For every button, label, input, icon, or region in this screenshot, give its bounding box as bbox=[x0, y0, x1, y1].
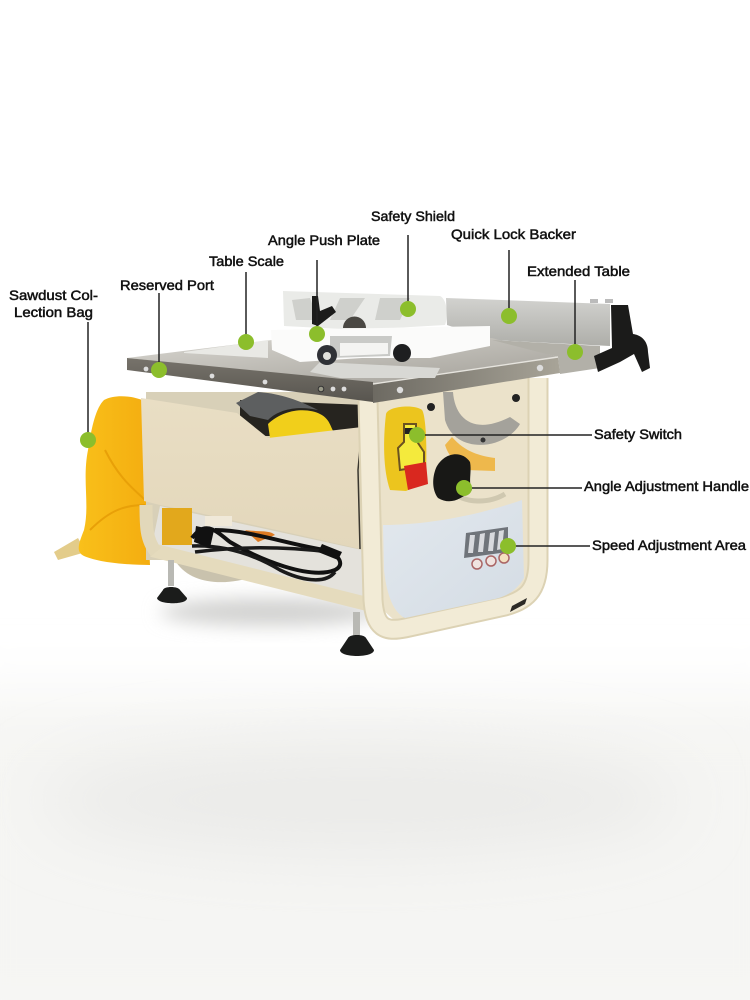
label: Reserved Port: Reserved Port bbox=[120, 277, 214, 293]
dust collection bag bbox=[54, 396, 150, 565]
label: Extended Table bbox=[527, 263, 630, 360]
angle adjustment handle bbox=[433, 454, 472, 501]
motor underside and cavity bbox=[146, 392, 366, 560]
label: Angle Push Plate bbox=[268, 232, 380, 342]
label: Reserved Port bbox=[120, 277, 214, 378]
label: Table Scale: Table Scale bbox=[209, 253, 284, 269]
extended table bbox=[492, 340, 600, 374]
bottom side rail bbox=[152, 550, 367, 604]
speed control panel bbox=[383, 500, 524, 618]
label: Quick Lock Backer: Quick Lock Backer bbox=[451, 226, 576, 242]
label: Sawdust Collection Bag: Lection Bag bbox=[14, 304, 93, 320]
label: Angle Adjustment Handle bbox=[456, 478, 749, 496]
label: Angle Adjustment Handle: Angle Adjustment Handle bbox=[584, 478, 749, 494]
white push plate bbox=[271, 326, 490, 378]
label: Angle Push Plate: Angle Push Plate bbox=[268, 232, 380, 248]
adjustable foot: left bbox=[157, 560, 187, 603]
label: Speed Adjustment Area bbox=[500, 537, 746, 554]
adjustable foot: right bbox=[340, 612, 374, 656]
table top bbox=[127, 338, 600, 403]
protective guard and blade bbox=[283, 291, 447, 330]
front cabinet bbox=[368, 378, 538, 630]
label: Quick Lock Backer bbox=[451, 226, 576, 324]
label: Safety Switch: Safety Switch bbox=[594, 426, 682, 442]
fence bbox=[446, 298, 610, 346]
scale plate bbox=[184, 340, 268, 358]
bevel scale and arc bbox=[427, 392, 520, 501]
label: Speed Adjustment Area: Speed Adjustment Area bbox=[592, 537, 746, 553]
label: Safety Shield bbox=[371, 208, 455, 317]
side edge bbox=[373, 357, 560, 403]
safety switch bbox=[384, 407, 428, 491]
background: floor shadow bbox=[0, 598, 750, 1000]
label: Table Scale bbox=[209, 253, 284, 350]
front edge bbox=[127, 358, 373, 402]
label: Safety Switch bbox=[409, 426, 682, 443]
side panel bbox=[141, 398, 362, 549]
lower opening with power cord bbox=[152, 506, 368, 600]
label: Extended Table: Extended Table bbox=[527, 263, 630, 279]
label: Safety Shield: Safety Shield bbox=[371, 208, 455, 224]
table saw product photo bbox=[54, 291, 650, 656]
rip fence clamp bbox=[590, 299, 650, 372]
label: Sawdust Collection Bag: Sawdust Col- bbox=[9, 287, 98, 303]
label: Sawdust Collection Bag bbox=[9, 287, 98, 448]
